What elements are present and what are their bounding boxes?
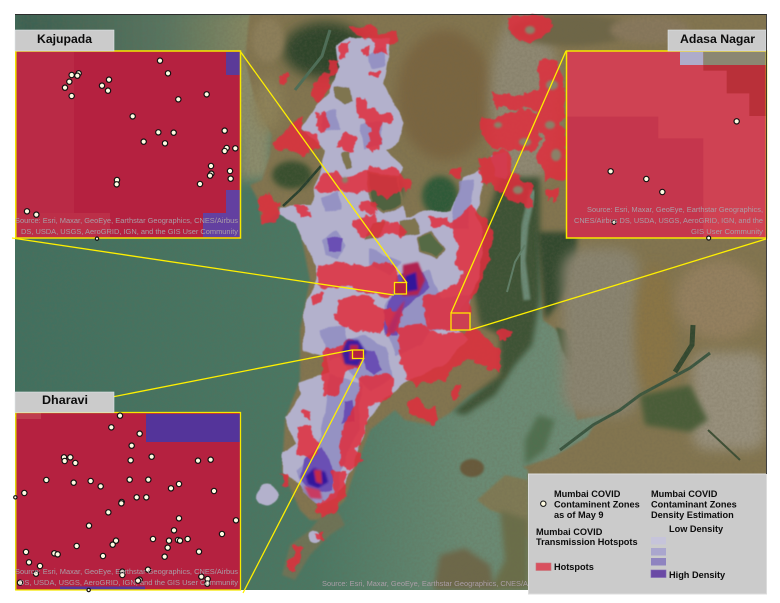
land gaps within north-east hotspots (342, 26, 561, 194)
land holes (335, 86, 444, 258)
density core: southern Mumbai (304, 468, 328, 499)
label: Kajupada (15, 30, 114, 51)
legend: contaminant zones label: Mumbai COVID (554, 489, 621, 499)
density core: Kajupada (386, 262, 425, 334)
locator square: Kajupada (394, 282, 406, 294)
attribution: DS, USDA, USGS, AeroGRID, IGN, and the GIS User Community (21, 227, 238, 236)
attribution: Source: Esri, Maxar, GeoEye, Earthstar Geographics, (587, 205, 763, 214)
attribution (15, 216, 238, 236)
connector: Kajupada (12, 51, 407, 295)
panel: Dharavi (14, 412, 240, 592)
hotspot layer (260, 16, 565, 570)
legend: contaminant zones label: Contaminent Zones (554, 500, 640, 510)
contaminant zone points (14, 413, 239, 592)
attribution: Source: Esri, Maxar, GeoEye, Earthstar Geographics, CNES/Airbus (15, 567, 238, 576)
map attribution: Source: Esri, Maxar, GeoEye, Earthstar Geographics, CNES/A (322, 579, 529, 588)
contaminant zone points (608, 119, 739, 240)
density estimation layer: medium density (298, 50, 507, 505)
attribution (15, 567, 238, 587)
density core: Dharavi (342, 340, 366, 366)
locator square: Dharavi (352, 350, 364, 358)
connector: Dharavi (15, 350, 364, 593)
legend: hotspot swatch (536, 563, 551, 570)
label: Dharavi: Dharavi (42, 395, 88, 407)
legend: density estimation heading: Contaminant Zones (651, 500, 737, 510)
panel: Adasa Nagar (566, 51, 767, 240)
legend: hotspots label: Hotspots (554, 562, 594, 572)
legend: contaminant zones symbol (541, 501, 546, 506)
legend: transmission hotspots heading: Transmission Hotspots (536, 537, 638, 547)
legend: low density label: Low Density (669, 524, 724, 534)
map border (15, 14, 766, 474)
legend: density estimation heading: Mumbai COVID (651, 489, 718, 499)
legend (528, 474, 766, 594)
legend: contaminant zones label: as of May 9 (554, 510, 604, 520)
label: Adasa Nagar: Adasa Nagar (680, 34, 756, 46)
panel: Kajupada (15, 51, 240, 240)
attribution: CNES/Airbus DS, USDA, USGS, AeroGRID, IGN, and the (574, 216, 763, 225)
legend: transmission hotspots heading: Mumbai COVID (536, 527, 603, 537)
density estimation layer: high density (300, 238, 430, 493)
label: Kajupada: Kajupada (37, 34, 93, 46)
locator square: Adasa Nagar (451, 313, 470, 330)
density estimation layer: low density (257, 38, 482, 543)
attribution (574, 205, 763, 236)
legend: high density label: High Density (669, 570, 726, 580)
label: Adasa Nagar (668, 30, 766, 51)
attribution: GIS User Community (691, 227, 763, 236)
attribution: Source: Esri, Maxar, GeoEye, Earthstar Geographics, CNES/Airbus (15, 216, 238, 225)
connector: Adasa Nagar (451, 51, 766, 330)
legend: density estimation heading: Density Estimation (651, 510, 734, 520)
attribution: DS, USDA, USGS, AeroGRID, IGN, and the GIS User Community (19, 578, 238, 587)
contaminant zone points (24, 58, 238, 240)
label: Dharavi (15, 392, 114, 412)
legend: density swatches (651, 537, 666, 578)
